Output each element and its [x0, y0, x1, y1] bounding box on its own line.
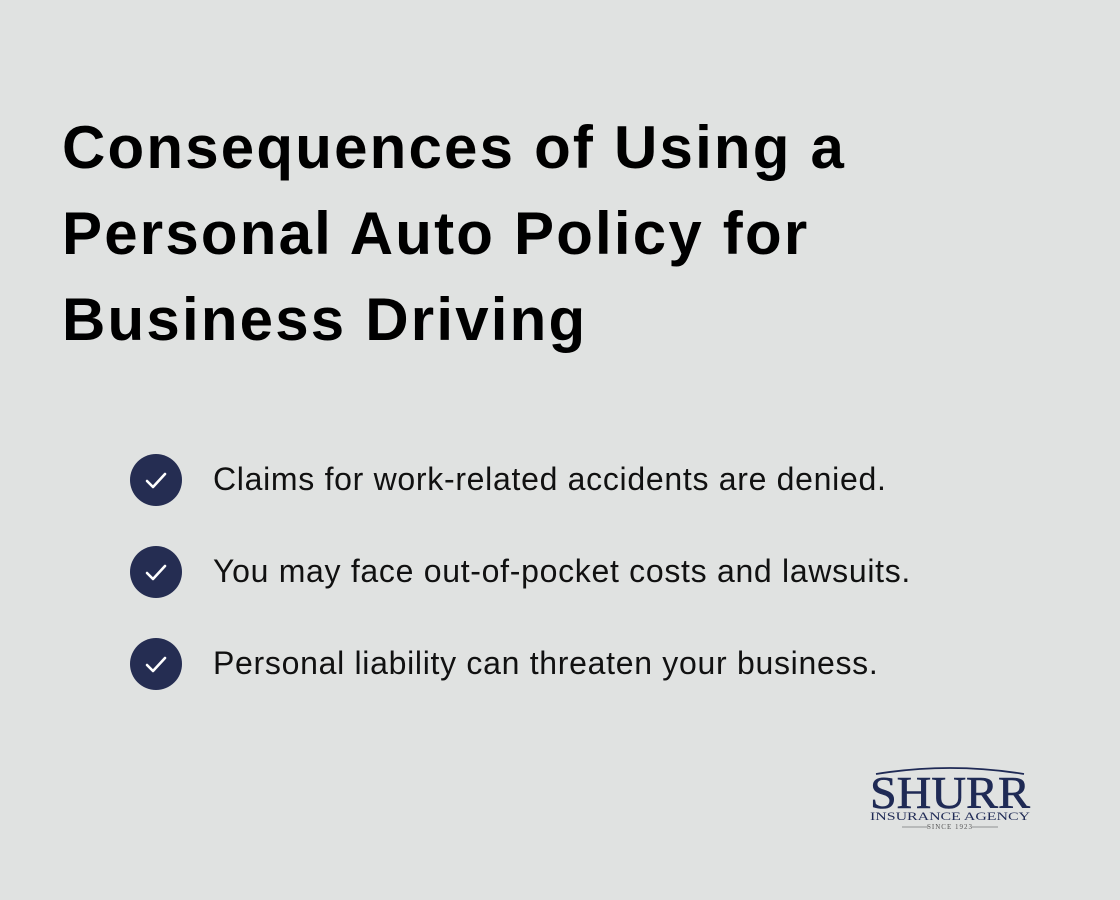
text: Claims for work-related accidents are denied.	[213, 461, 887, 497]
item 3	[130, 638, 878, 690]
item 1	[130, 454, 887, 506]
title	[62, 114, 846, 353]
title: Personal Auto Policy for	[62, 200, 809, 267]
icon: check	[130, 638, 182, 690]
logo: SHURR	[870, 767, 1030, 818]
item 2	[130, 546, 911, 598]
logo: INSURANCE AGENCY	[870, 809, 1030, 823]
title: Business Driving	[62, 286, 587, 353]
text: Personal liability can threaten your business.	[213, 645, 878, 681]
text: You may face out-of-pocket costs and lawsuits.	[213, 553, 911, 589]
icon: check	[130, 454, 182, 506]
icon: check	[130, 546, 182, 598]
title: Consequences of Using a	[62, 114, 846, 181]
